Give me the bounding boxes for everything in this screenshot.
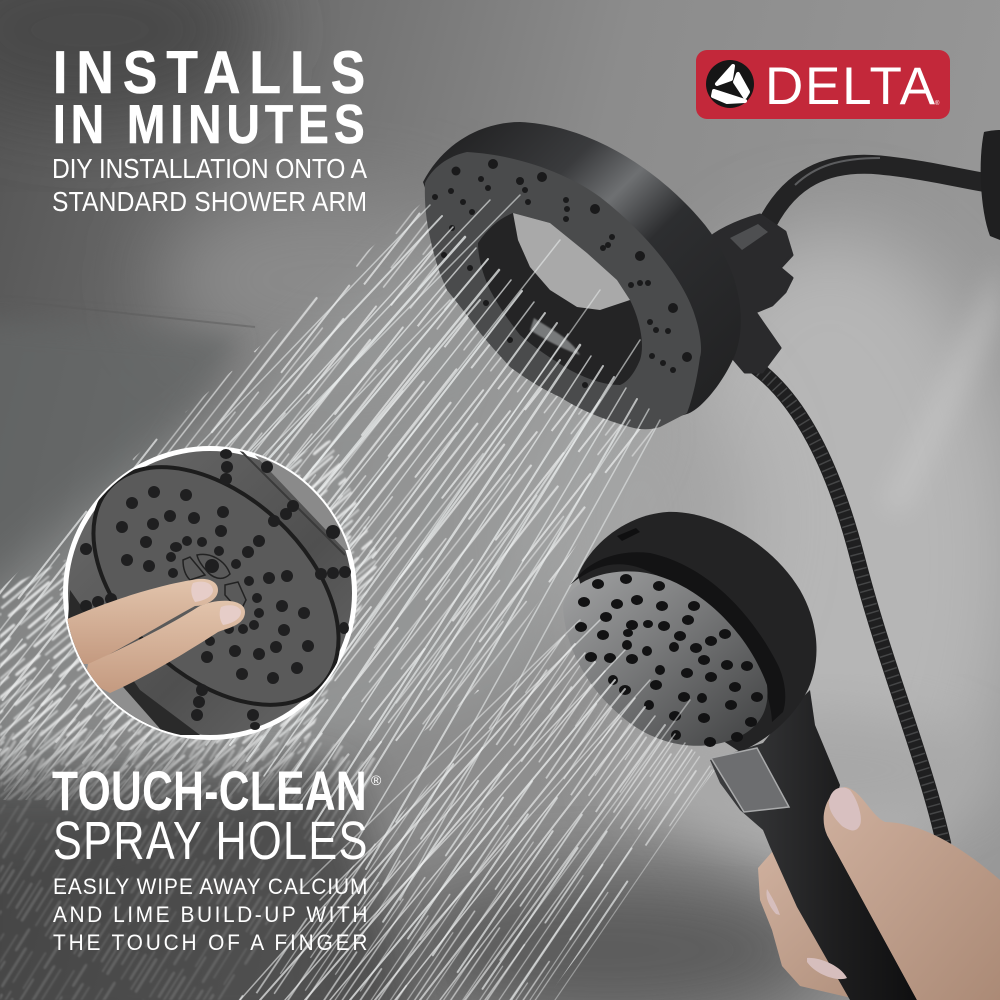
text: installation description: DIY INSTALLATION ONTO A	[52, 153, 367, 184]
heading: touch-clean spray holes: ®	[371, 772, 382, 788]
fingernails	[766, 889, 847, 979]
handheld: vent slot	[617, 528, 640, 541]
inset circle: touch-clean detail	[63, 446, 357, 740]
text: touch-clean description: EASILY WIPE AWAY CALCIUM	[53, 875, 367, 899]
logo: Delta: ®	[935, 100, 940, 107]
handheld: back shell	[578, 512, 816, 752]
water spray fill: upper and left	[0, 200, 660, 1000]
thumbnail	[829, 787, 861, 830]
heading: touch-clean spray holes: TOUCH-CLEAN	[52, 759, 367, 822]
text: touch-clean description: AND LIME BUILD-UP WITH	[53, 903, 367, 927]
upper spray streaks	[60, 195, 660, 900]
handheld: spray holes	[575, 574, 763, 747]
text: touch-clean description	[53, 875, 367, 955]
handheld: spray selector panel	[711, 748, 789, 812]
handle	[710, 690, 917, 1000]
heading: installs in minutes: IN MINUTES	[53, 93, 365, 155]
head: back shell	[423, 122, 741, 428]
water spray fill: lower streaks	[230, 635, 715, 1000]
heading: installs in minutes: INSTALLS	[53, 38, 365, 106]
logo: Delta: DELTA	[765, 57, 936, 116]
inset: centre petals	[183, 554, 246, 612]
head: spray holes	[432, 159, 692, 388]
shade behind lower text	[0, 770, 430, 1000]
text: touch-clean description: THE TOUCH OF A FINGER	[53, 931, 367, 955]
head: centre opening	[513, 213, 630, 310]
inset: two fingers	[65, 579, 245, 693]
text: installation description	[52, 153, 367, 217]
inset: finger nails	[191, 582, 241, 625]
heading: touch-clean spray holes	[52, 759, 382, 871]
handheld spray streaks	[240, 620, 712, 1000]
text: installation description: STANDARD SHOWER ARM	[52, 186, 367, 217]
thumb and hand	[824, 787, 1000, 1000]
inset: spray holes	[80, 449, 351, 730]
head: dark inner ring	[478, 213, 642, 385]
inset: lower dark rim and lighter wall	[60, 590, 200, 735]
heading: installs in minutes	[53, 38, 365, 155]
hose	[748, 362, 944, 845]
handheld: spray face	[563, 571, 768, 746]
hand: fingers behind handle	[758, 850, 920, 1000]
inset: inner spray ring	[92, 465, 340, 707]
connector bracket	[704, 215, 792, 372]
shower arm and wall flange	[768, 130, 1000, 240]
logo: Delta	[696, 50, 950, 119]
heading: touch-clean spray holes: SPRAY HOLES	[53, 812, 367, 871]
head: spray face ring	[425, 152, 701, 429]
handheld shower head	[563, 512, 1000, 1000]
upper shower head	[423, 122, 741, 429]
